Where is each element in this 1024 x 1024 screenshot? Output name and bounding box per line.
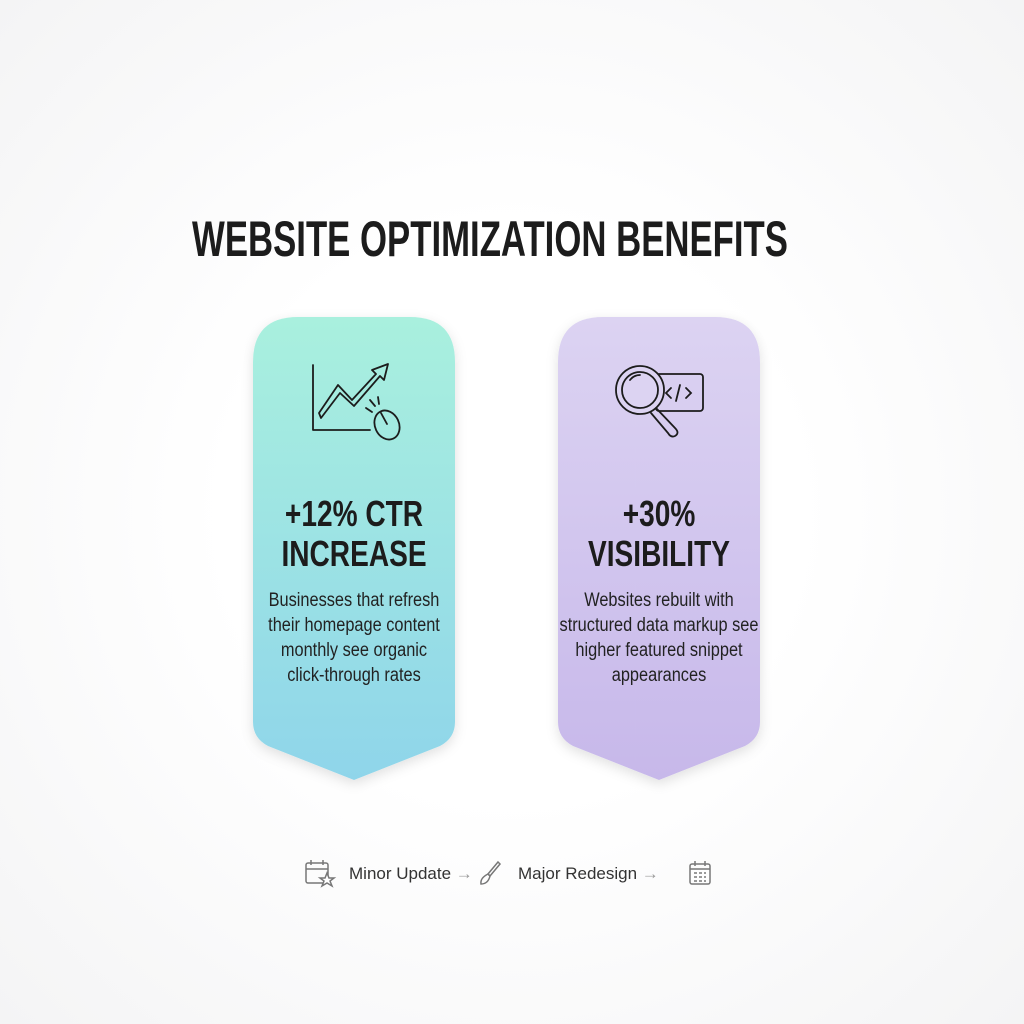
text: visibility description: Websites rebuilt with <box>584 590 734 611</box>
text: visibility description: structured data markup see <box>560 615 758 636</box>
text: CTR description: click-through rates <box>287 665 421 686</box>
stat: visibility: +30% <box>623 493 695 534</box>
stat: visibility <box>588 493 730 574</box>
stat: CTR: +12% CTR <box>285 493 423 534</box>
text: CTR description: their homepage content <box>268 615 440 636</box>
icon: calendar star <box>305 860 336 888</box>
card: CTR <box>253 317 455 780</box>
text: CTR description: monthly see organic <box>281 640 427 661</box>
timeline <box>305 860 711 888</box>
icon: brush <box>480 861 501 885</box>
title: WEBSITE OPTIMIZATION BENEFITS <box>192 211 788 267</box>
text: visibility description <box>560 590 758 686</box>
label: minor update: Minor Update → <box>349 864 473 883</box>
text: CTR description <box>268 590 440 686</box>
icon: magnifier with code <box>616 366 703 437</box>
icon: calendar <box>689 861 711 885</box>
icon: chart with mouse <box>313 364 404 444</box>
stat: CTR <box>281 493 427 574</box>
stat: visibility: VISIBILITY <box>588 533 730 574</box>
stat: CTR: INCREASE <box>281 533 427 574</box>
text: visibility description: appearances <box>612 665 706 686</box>
text: visibility description: higher featured snippet <box>575 640 743 661</box>
text: CTR description: Businesses that refresh <box>269 590 439 611</box>
card: visibility <box>558 317 760 780</box>
label: major redesign: Major Redesign → <box>518 864 659 883</box>
